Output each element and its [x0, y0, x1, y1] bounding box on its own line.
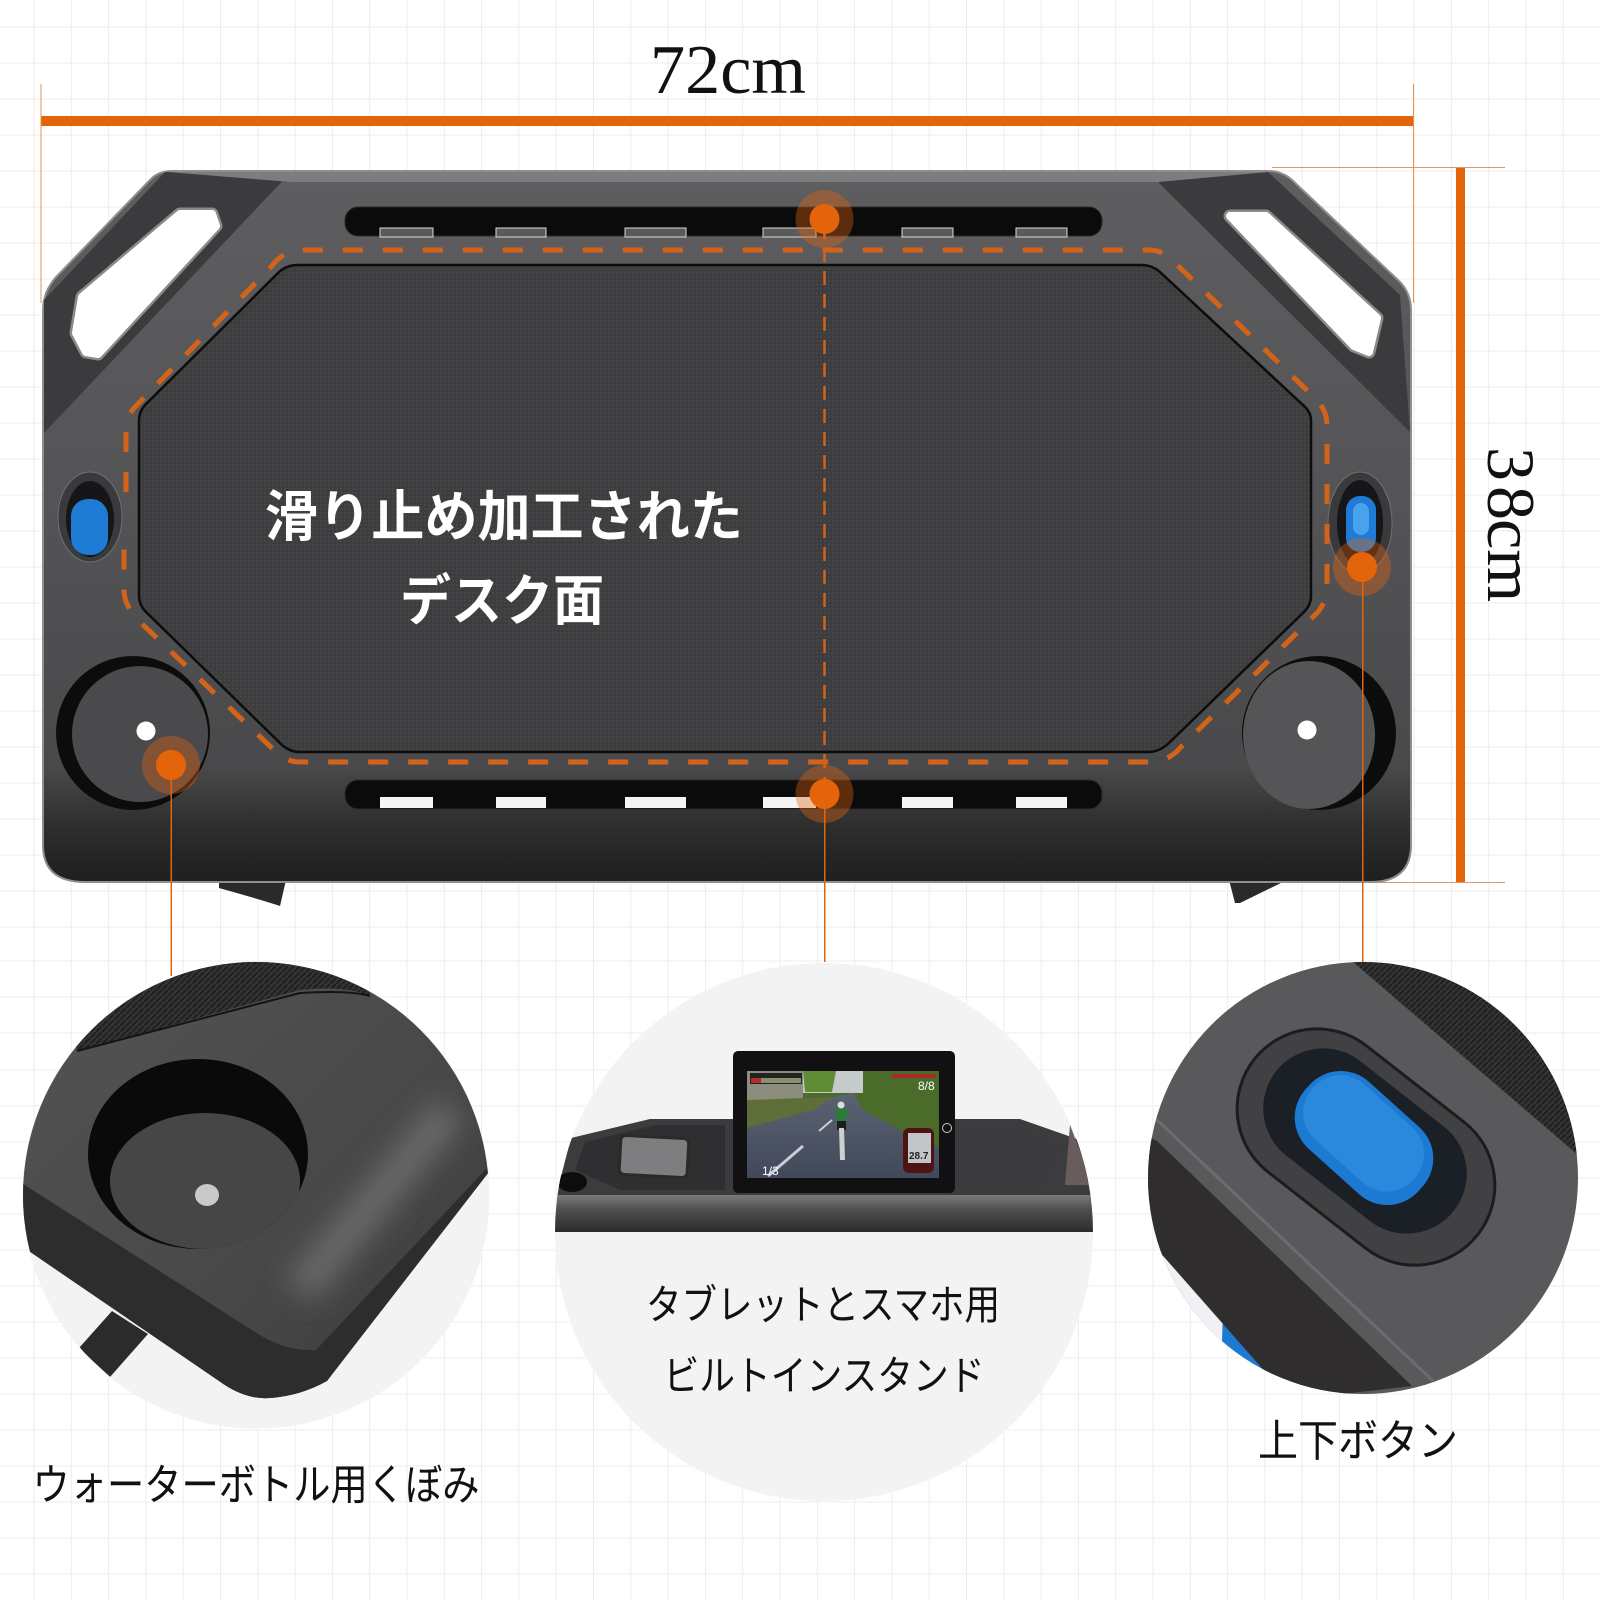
callout markers and leader lines	[142, 190, 1391, 976]
home button	[942, 1124, 952, 1132]
game screen	[747, 1071, 939, 1178]
darker corner panels	[44, 172, 1410, 433]
top tablet slot	[345, 207, 1102, 237]
textured mat	[76, 962, 370, 1050]
white label: non-slip surface: 滑り止め加工された	[265, 486, 743, 548]
bike computer	[903, 1128, 934, 1173]
left up/down button	[58, 472, 122, 562]
cable	[79, 1311, 148, 1377]
panel: built-in tablet and phone stand	[555, 963, 1095, 1501]
game screen: 28.7	[909, 1151, 929, 1162]
chevron textured mat	[1353, 962, 1577, 1154]
mini desk surface	[555, 1119, 1095, 1200]
small cup recess	[557, 1172, 587, 1192]
desk body	[43, 171, 1411, 882]
white gap under desk edge	[1160, 1248, 1274, 1375]
button bezel	[1205, 997, 1527, 1297]
height dimension: 38cm: 38cm	[1473, 447, 1549, 602]
dark front face	[1140, 1132, 1412, 1400]
white label: non-slip surface	[265, 486, 743, 632]
non-slip mat	[139, 265, 1311, 752]
tablet	[733, 1051, 955, 1193]
desk feet	[219, 880, 1287, 906]
white label: non-slip surface: デスク面	[400, 570, 604, 632]
top edge highlight band	[168, 172, 1268, 182]
desk product, top view	[43, 171, 1411, 906]
smartphone	[620, 1137, 688, 1176]
panel: up/down button	[1140, 950, 1590, 1400]
HUD	[750, 1073, 802, 1084]
road marking	[768, 1146, 803, 1176]
label: tablet stand	[646, 1282, 1000, 1399]
width dimension: 72cm: 72cm	[650, 32, 806, 109]
bottle cup	[88, 1059, 308, 1249]
striped object at the right edge	[1065, 1125, 1089, 1185]
label: up/down button: 上下ボタン	[1258, 1417, 1458, 1466]
blue strip beneath	[1222, 1324, 1285, 1380]
bottom tablet slot	[345, 780, 1102, 809]
center dashed divider	[823, 225, 826, 790]
cyclist	[835, 1108, 848, 1121]
orange dashed outline of desk surface	[124, 250, 1327, 762]
height dimension: 38cm	[1272, 167, 1549, 883]
game screen: 8/8	[918, 1079, 935, 1093]
button panel surface	[1140, 950, 1590, 1400]
right up/down button	[1328, 472, 1392, 574]
light reflection	[300, 1110, 450, 1290]
left bottle recess	[56, 656, 210, 810]
width dimension: 72cm	[40, 32, 1414, 303]
right bottle recess	[1242, 656, 1396, 810]
mini desk front bar	[555, 1195, 1095, 1232]
game screen: 1/3	[762, 1164, 779, 1178]
label: tablet stand: ビルトインスタンド	[664, 1353, 984, 1399]
label: tablet stand: タブレットとスマホ用	[646, 1282, 1000, 1328]
panel: water bottle recess	[20, 940, 490, 1428]
carry handle openings	[76, 214, 1377, 354]
label: water bottle recess: ウォーターボトル用くぼみ	[32, 1462, 480, 1510]
recess desk corner	[20, 950, 489, 1398]
